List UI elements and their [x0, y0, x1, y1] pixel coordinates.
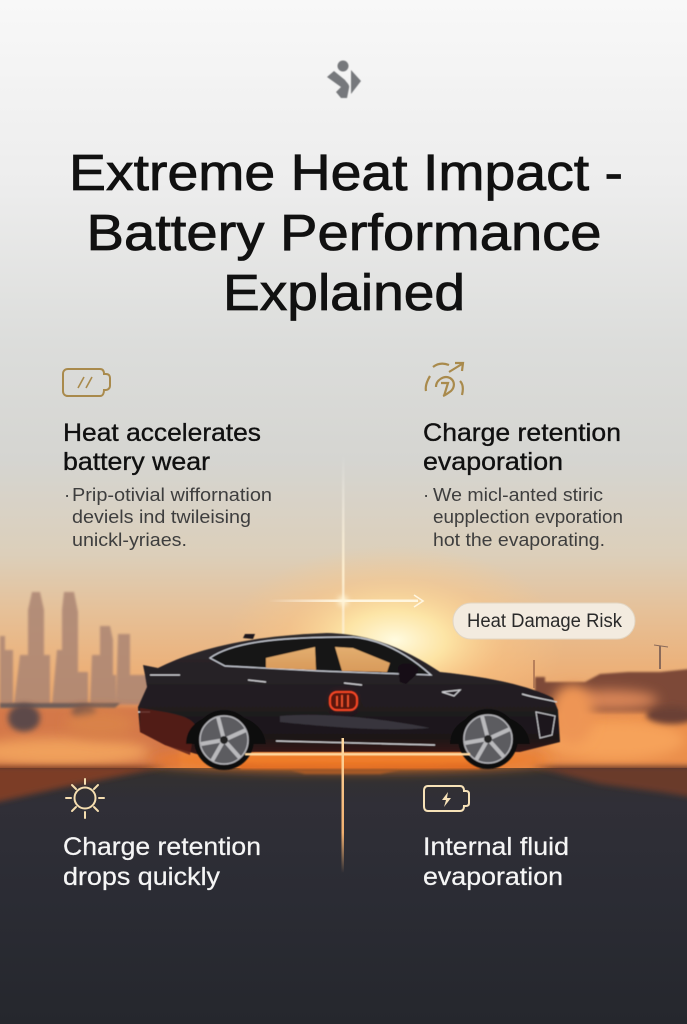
heading: Heat accelerates [63, 419, 261, 447]
body text [64, 484, 272, 550]
vertical light beam lower [342, 738, 344, 873]
side mirror [398, 664, 418, 684]
callout: heat damage risk [453, 603, 635, 639]
heading [63, 419, 261, 476]
door crease [280, 715, 430, 729]
city skyline [0, 592, 150, 705]
road [0, 768, 687, 1024]
icon: sun [66, 779, 104, 818]
roof fin [243, 634, 255, 639]
rear window [266, 647, 316, 670]
front window [335, 647, 390, 672]
body text [423, 484, 623, 550]
heading: Internal fluid [423, 833, 569, 861]
heading: drops quickly [63, 863, 221, 891]
panel: charge retention drops quickly [63, 779, 261, 891]
body text: unickl-yriaes. [72, 529, 187, 550]
background: orange ground haze [0, 725, 687, 775]
panel: heat accelerates battery wear [63, 369, 272, 550]
icon: battery with bolt [424, 786, 469, 811]
heading: Charge retention [423, 419, 621, 447]
grille [536, 712, 555, 738]
heading [423, 419, 621, 476]
car [138, 633, 560, 770]
front wheel arch [450, 714, 530, 744]
background: hazy sky [0, 0, 687, 730]
ground light line [245, 753, 470, 756]
logo icon [327, 60, 361, 98]
heading [423, 833, 569, 891]
ground glow streaks [0, 750, 687, 806]
heading: evaporation [423, 448, 563, 476]
body text: · [423, 484, 429, 505]
title: Extreme Heat Impact - [69, 144, 623, 201]
heading: evaporation [423, 863, 563, 891]
vertical light beam upper [342, 455, 344, 650]
rear lower glow [140, 708, 195, 755]
heading: battery wear [63, 448, 210, 476]
body highlights [138, 675, 557, 745]
dust clouds [0, 685, 687, 768]
body text: eupplection evporation [433, 506, 623, 527]
body text: We micl-anted stiric [433, 484, 603, 505]
rear wheel [194, 710, 254, 770]
callout: heat damage risk: Heat Damage Risk [467, 611, 622, 632]
arrow: horizontal light beam [268, 595, 423, 607]
title [69, 144, 623, 321]
icon: heat gauge with arrow [426, 363, 463, 396]
body text: hot the evaporating. [433, 529, 605, 550]
heading: Charge retention [63, 833, 261, 861]
body text: Prip-otivial wiffornation [72, 484, 272, 505]
icon: battery [63, 369, 110, 396]
body text: · [64, 484, 70, 505]
front wheel [458, 709, 518, 769]
heading [63, 833, 261, 891]
panel: internal fluid evaporation [423, 786, 569, 891]
sun glow behind car [225, 545, 565, 735]
title: Battery Performance [86, 204, 602, 261]
title: Explained [223, 264, 465, 321]
body text: deviels ind twileising [72, 506, 251, 527]
distant hills and towers [534, 645, 687, 715]
panel: charge retention evaporation [423, 363, 623, 550]
window trim [210, 637, 431, 675]
glowing red battery badge [330, 692, 357, 710]
rear wheel arch [186, 714, 266, 744]
car body [138, 633, 560, 755]
